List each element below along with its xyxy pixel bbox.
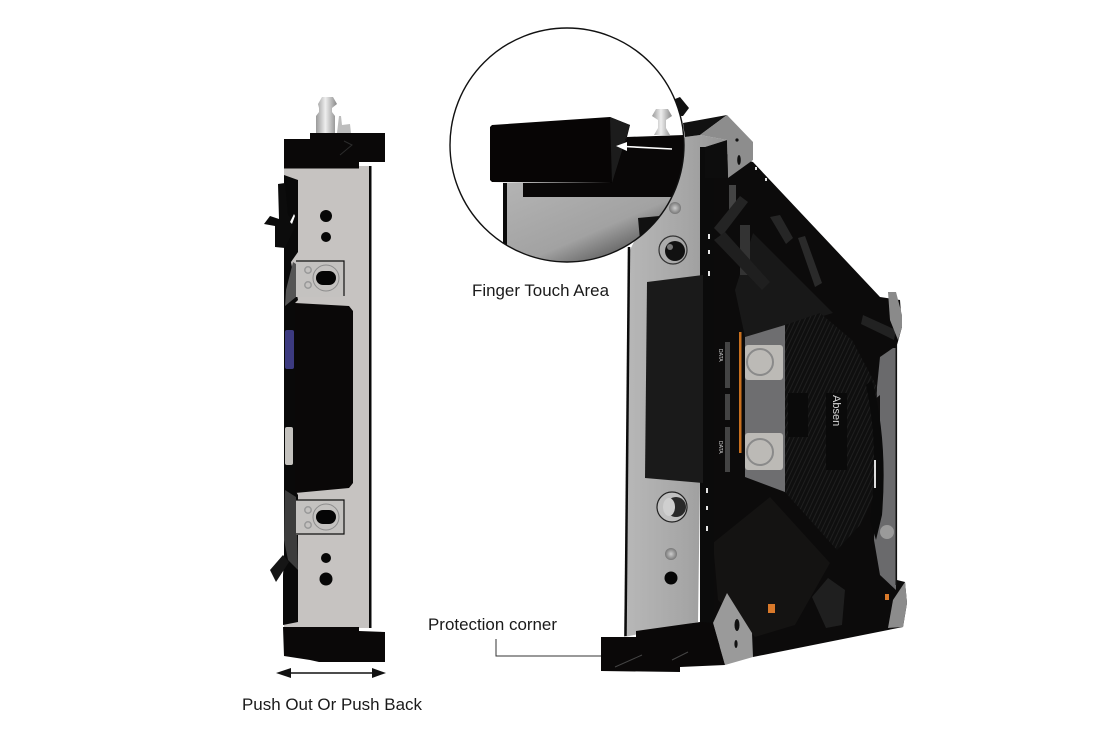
top protection corner (284, 133, 385, 168)
upper connector plate (296, 261, 344, 297)
brand mark: Absen (830, 395, 842, 426)
dark sticker panels on mesh (788, 393, 847, 470)
front gray plate (624, 135, 727, 637)
side plate (284, 166, 369, 628)
black latch above inset (675, 97, 689, 116)
label: protection corner: Protection corner (428, 616, 558, 634)
white pointer arrow (616, 142, 672, 151)
bottom protection corner (283, 627, 385, 662)
connector sockets (745, 345, 783, 470)
lower connector plate (296, 500, 344, 535)
double-headed push arrow (276, 668, 386, 678)
edge indicator dots (706, 167, 767, 531)
orange cable (739, 332, 742, 453)
upper inner housing (735, 233, 833, 337)
data connector strip (285, 330, 294, 369)
data labels: DATA (717, 441, 723, 454)
bolts on front plate (657, 202, 687, 584)
bottom gray corner (713, 593, 753, 665)
perspective view of cabinet (601, 115, 907, 672)
leader line (496, 639, 601, 656)
inset rear black body (523, 135, 684, 197)
locking pin (316, 97, 351, 133)
right gray strip and knob (866, 345, 897, 590)
label: finger touch area: Finger Touch Area (472, 282, 610, 300)
black rear panel (295, 303, 353, 493)
label: push out or push back: Push Out Or Push Back (242, 695, 422, 714)
right top and bottom corners (888, 292, 902, 340)
top gray corner (700, 115, 753, 178)
lower black octagonal housing (713, 497, 830, 637)
inset gray plate (507, 183, 671, 262)
magnified inset circle (450, 28, 688, 263)
inner gray connector plate (745, 325, 785, 492)
inset pin (652, 109, 672, 135)
mounting holes (320, 210, 332, 586)
data labels (717, 349, 723, 454)
mesh back panel (785, 313, 877, 550)
left side view of cabinet (264, 97, 385, 662)
left edge strap and latch (283, 175, 298, 625)
protection corner on the perspective view (601, 622, 725, 672)
top black cap (683, 115, 727, 137)
inset outline (450, 28, 684, 262)
data labels: DATA (717, 349, 723, 362)
rear black body (700, 147, 907, 657)
orange latches (768, 594, 889, 613)
black straps: upper (714, 185, 896, 340)
diagram: LED cabinet views (243, 27, 907, 710)
inset protection corner (490, 117, 630, 183)
black plate window (645, 275, 703, 483)
